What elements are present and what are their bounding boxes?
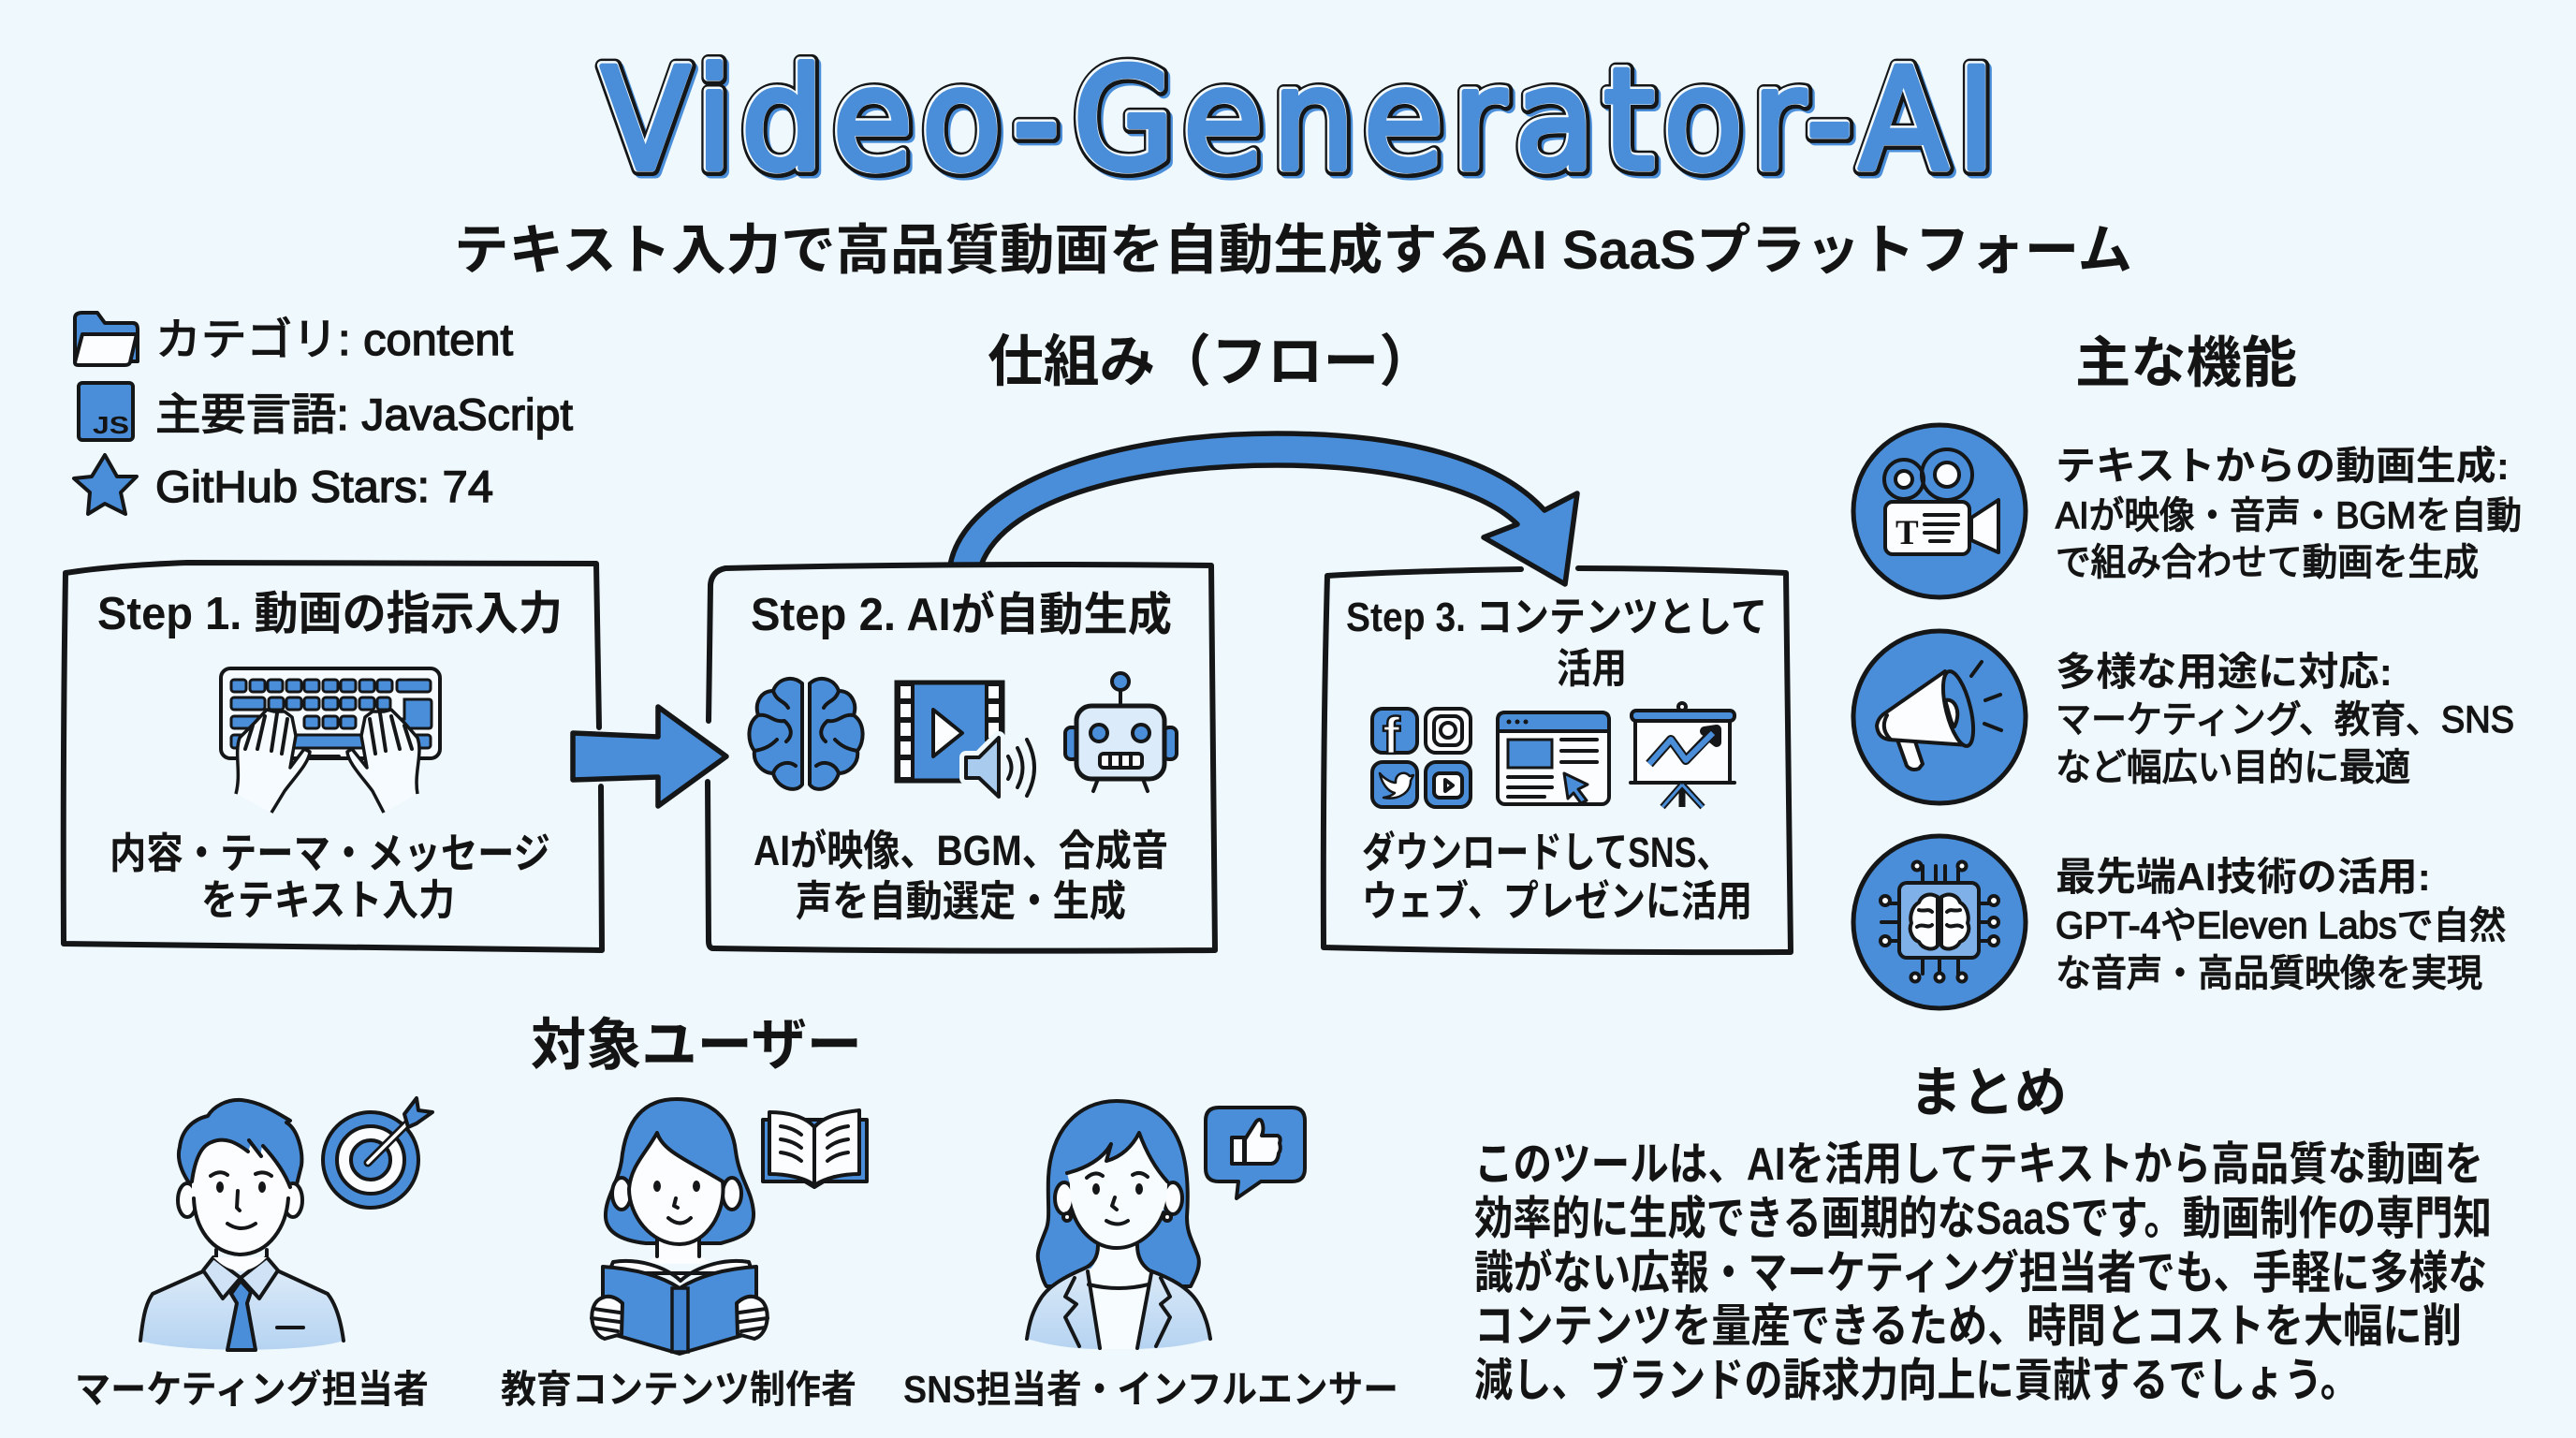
person: man in shirt bbox=[140, 1100, 344, 1350]
heading: target users: 対象ユーザー bbox=[531, 1014, 862, 1077]
box outline bbox=[1324, 568, 1791, 952]
step 1 heading: Step 1. 動画の指示入力 bbox=[97, 589, 563, 639]
icon: AI chip bbox=[1853, 836, 2026, 1008]
title: Video-Generator-AI bbox=[601, 39, 1996, 202]
box outline bbox=[708, 565, 1215, 951]
step 3 description: ウェブ、プレゼンに活用 bbox=[1362, 877, 1752, 925]
label: 教育コンテンツ制作者 bbox=[501, 1368, 856, 1411]
icon: social media: f bbox=[1383, 706, 1400, 765]
feature 3 text: GPT-4やEleven Labsで自然 bbox=[2056, 905, 2506, 946]
step 3 heading bbox=[1346, 594, 1767, 692]
title: Video-Generator-AI bbox=[600, 38, 1995, 201]
icon: video camera: T bbox=[1895, 514, 1919, 552]
icon: brain bbox=[749, 679, 863, 789]
label: SNS担当者・インフルエンサー bbox=[903, 1368, 1398, 1411]
step 3 description: ダウンロードしてSNS、 bbox=[1362, 829, 1730, 876]
step 1 description: 内容・テーマ・メッセージ bbox=[110, 829, 550, 877]
feature 1 text bbox=[2056, 444, 2522, 583]
language text: 主要言語: JavaScript bbox=[155, 389, 573, 439]
category text: カテゴリ: content bbox=[155, 315, 513, 364]
heading: summary: まとめ bbox=[1910, 1063, 2067, 1123]
icon: JavaScript bbox=[79, 383, 133, 440]
step 3 heading: 活用 bbox=[1557, 646, 1627, 692]
arrow: step 1 to step 2 bbox=[573, 707, 726, 806]
person: woman with long hair in jacket bbox=[1027, 1101, 1210, 1349]
icon: robot bbox=[1065, 673, 1177, 791]
user: marketer bbox=[75, 1098, 432, 1411]
title: Video-Generator-AI bbox=[604, 42, 1998, 205]
feature 3 text: な音声・高品質映像を実現 bbox=[2056, 953, 2482, 994]
icon: megaphone bbox=[1853, 631, 2026, 803]
feature 1 text: AIが映像・音声・BGMを自動 bbox=[2056, 495, 2522, 536]
step 2 description: AIが映像、BGM、合成音 bbox=[754, 827, 1168, 874]
icon: presentation board bbox=[1631, 703, 1734, 807]
icon: keyboard and hands bbox=[221, 668, 440, 813]
summary text: 減し、ブランドの訴求力向上に貢献するでしょう。 bbox=[1474, 1356, 2359, 1406]
stars text: GitHub Stars: 74 bbox=[155, 462, 493, 511]
feature 1 text: テキストからの動画生成: bbox=[2056, 444, 2510, 488]
metadata list bbox=[74, 313, 573, 514]
icon: JavaScript: JS bbox=[93, 411, 129, 439]
icon: star bbox=[74, 455, 137, 514]
step 3 description bbox=[1362, 829, 1752, 925]
panel: step 3 bbox=[1324, 568, 1791, 952]
feature 1 bbox=[1853, 425, 2522, 597]
feature 3 text bbox=[2056, 855, 2506, 994]
step 2 description bbox=[754, 827, 1168, 925]
icon: thumbs-up bubble bbox=[1206, 1108, 1305, 1198]
arrow: step 2 to step 3 bbox=[950, 433, 1577, 584]
step 1 description: をテキスト入力 bbox=[201, 876, 455, 924]
heading: features: 主な機能 bbox=[2075, 332, 2297, 394]
feature 3 text: 最先端AI技術の活用: bbox=[2056, 855, 2431, 899]
summary text bbox=[1474, 1139, 2492, 1406]
feature 2 text: など幅広い目的に最適 bbox=[2056, 747, 2410, 788]
panel: step 2 bbox=[708, 565, 1215, 951]
user: education creator bbox=[501, 1099, 867, 1411]
icon: target bbox=[323, 1098, 432, 1208]
user: social media influencer bbox=[903, 1101, 1398, 1411]
icon: open book bbox=[763, 1110, 867, 1187]
subtitle: テキスト入力で高品質動画を自動生成するAI SaaSプラットフォーム bbox=[454, 220, 2132, 281]
feature 2 text bbox=[2056, 650, 2514, 788]
step 3 heading: Step 3. コンテンツとして bbox=[1346, 594, 1767, 640]
icon: social media bbox=[1372, 706, 1471, 807]
label: マーケティング担当者 bbox=[75, 1368, 429, 1411]
step 2 description: 声を自動選定・生成 bbox=[796, 877, 1126, 925]
icon: folder bbox=[75, 313, 138, 365]
step 1 description bbox=[110, 829, 550, 924]
feature 3 bbox=[1853, 836, 2506, 1008]
person: woman reading a book bbox=[592, 1099, 768, 1354]
step 2 heading: Step 2. AIが自動生成 bbox=[751, 590, 1172, 640]
panel: step 1 bbox=[64, 563, 602, 950]
feature 2 bbox=[1853, 631, 2514, 803]
feature 2 text: 多様な用途に対応: bbox=[2056, 650, 2393, 694]
heading: flow: 仕組み（フロー） bbox=[988, 330, 1435, 393]
title: Video-Generator-AI bbox=[601, 39, 1996, 202]
icon: video camera bbox=[1853, 425, 2026, 597]
icon: video and sound bbox=[897, 682, 1034, 797]
feature 1 text: で組み合わせて動画を生成 bbox=[2056, 542, 2479, 583]
box outline bbox=[64, 563, 602, 950]
feature 2 text: マーケティング、教育、SNS bbox=[2056, 699, 2514, 741]
icon: browser bbox=[1498, 712, 1609, 804]
